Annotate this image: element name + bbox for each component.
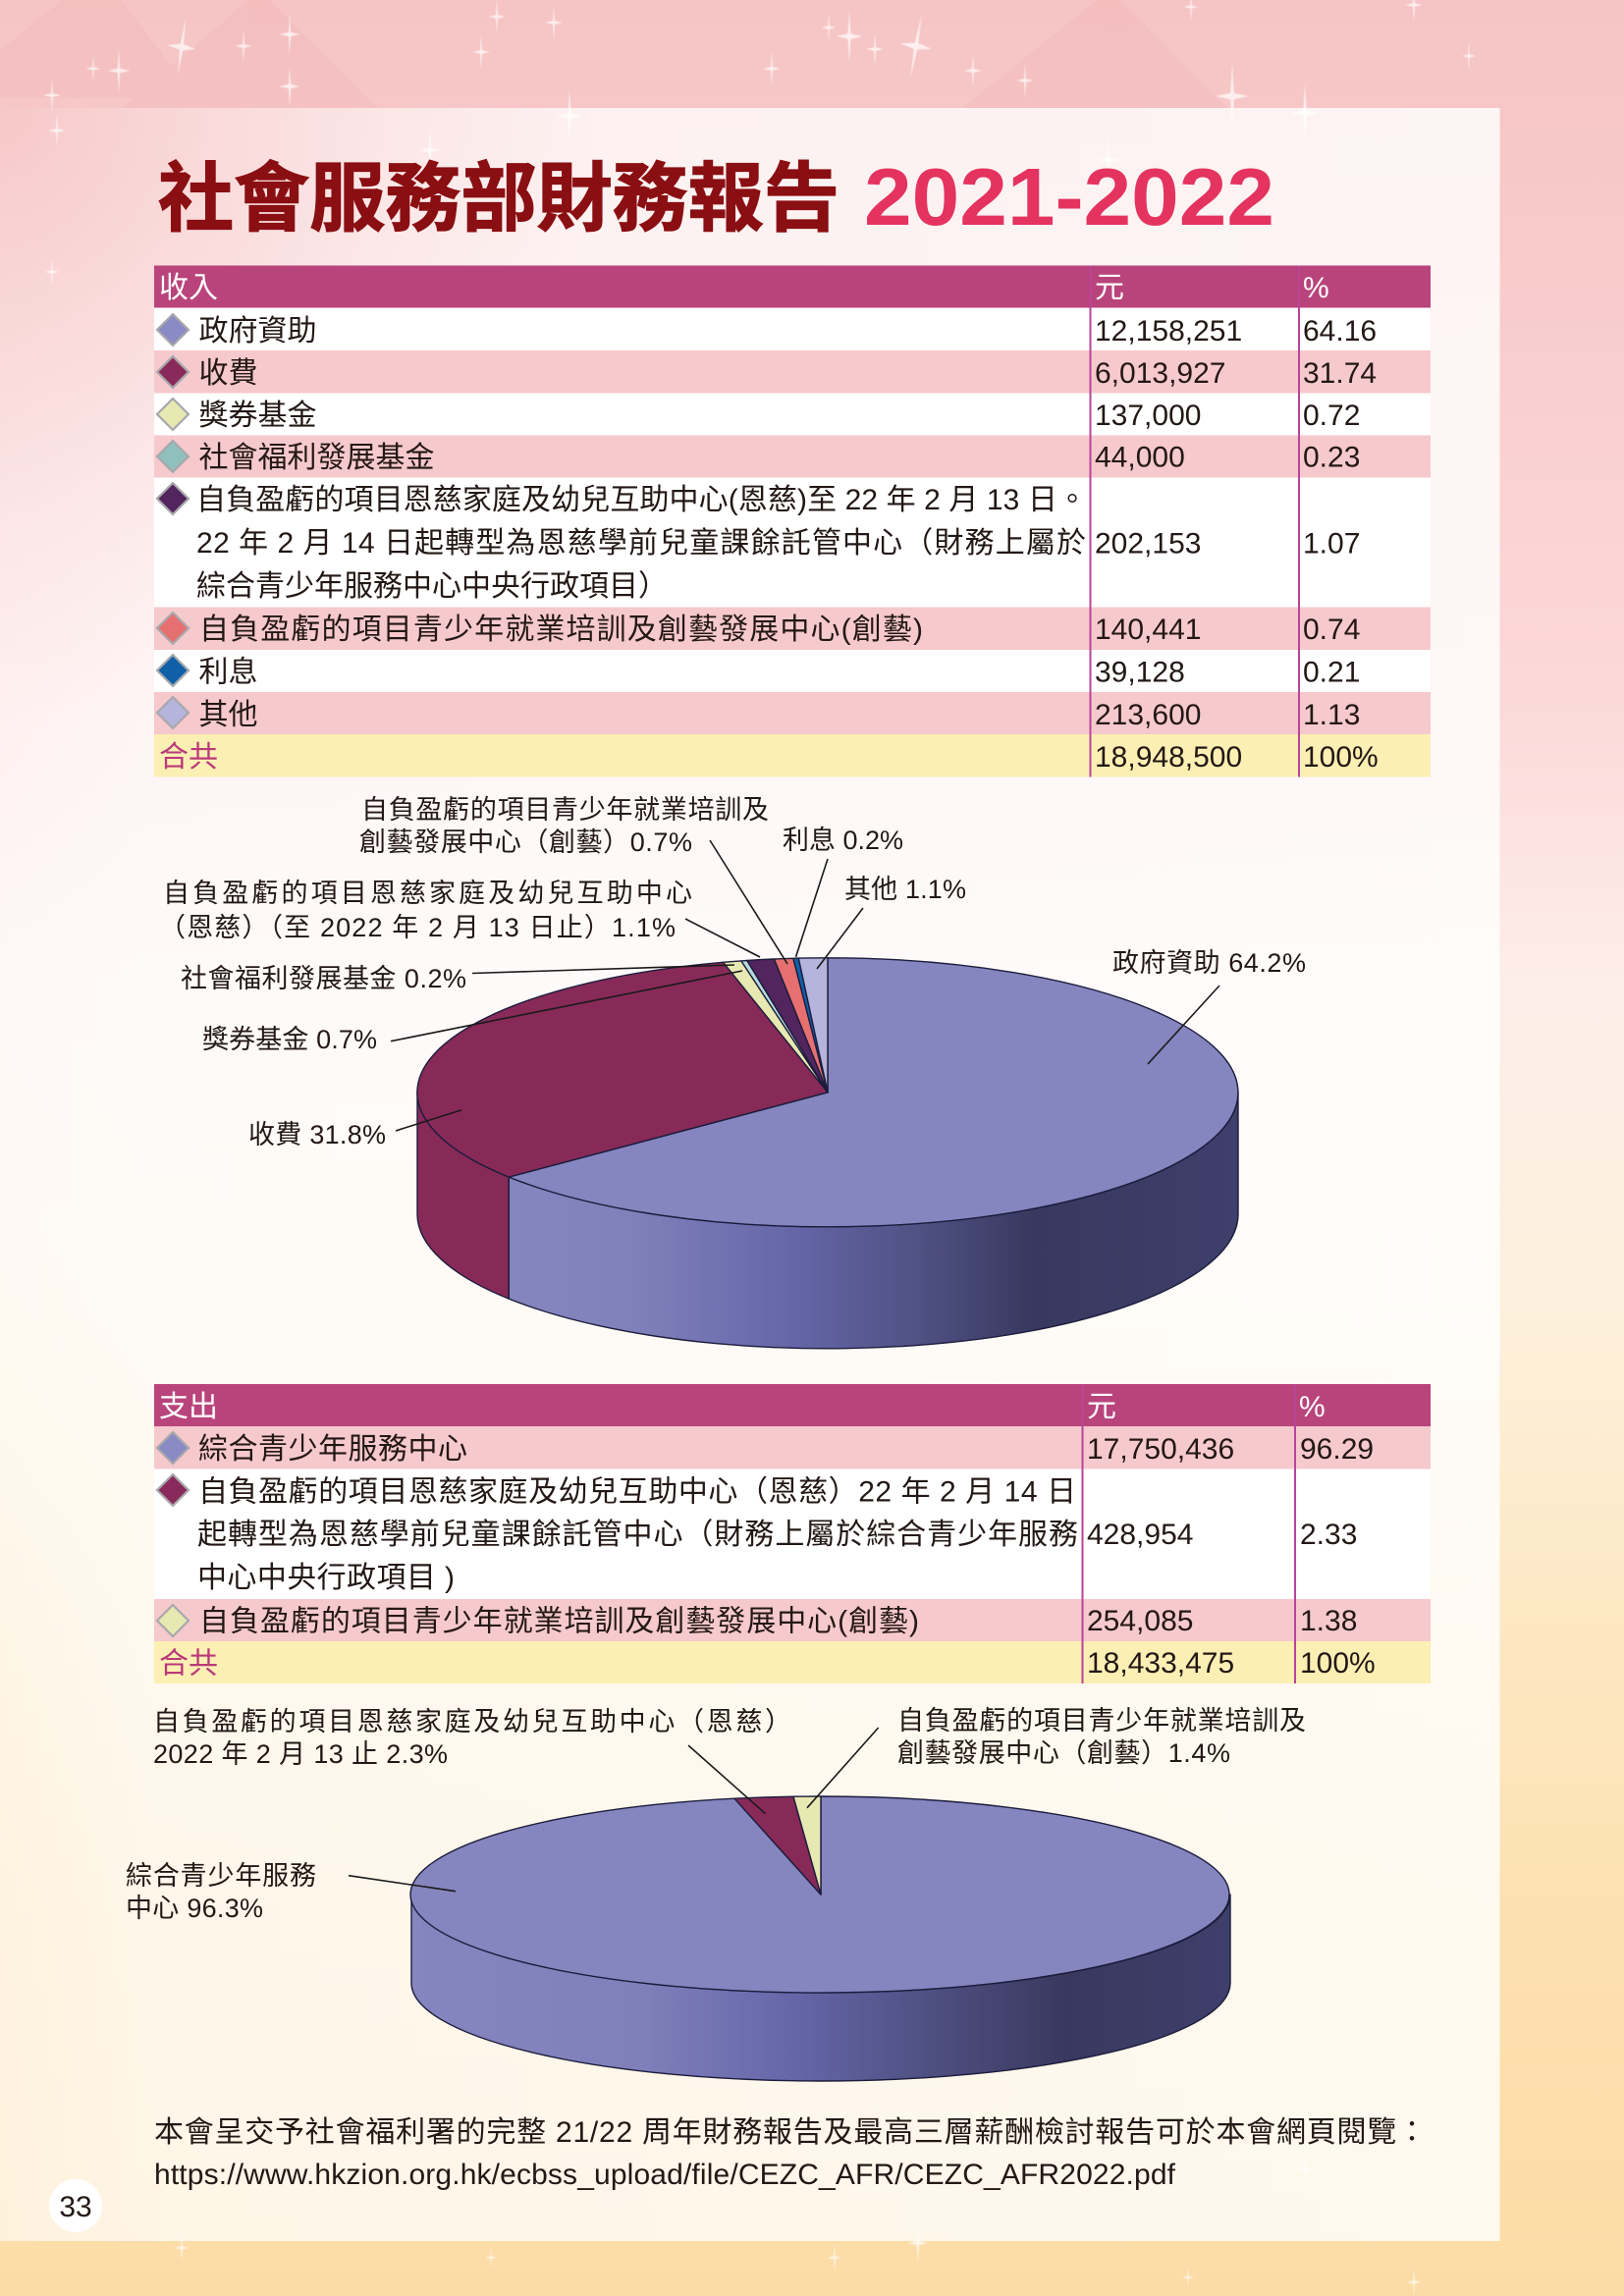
- row: 自負盈虧的項目恩慈: [154, 477, 1431, 607]
- row: 自負盈虧的項目恩慈: 202,153: [1095, 528, 1201, 560]
- row: 社會福利發展基金: [154, 436, 1431, 477]
- expenditure header row: [154, 1384, 1431, 1426]
- row: 獎券基金: 0.72: [1303, 400, 1360, 432]
- row: 自負盈虧的項目恩慈: 綜合青少年服務中心中央行政項目）: [196, 570, 668, 603]
- income header row: 收入: [159, 272, 218, 304]
- income pie labels: 政府資助 64.2%: [1112, 948, 1306, 978]
- expenditure total row: 18,433,475: [1087, 1647, 1234, 1680]
- income header row: %: [1303, 272, 1329, 304]
- expenditure pie labels: 中心 96.3%: [126, 1894, 263, 1923]
- row: 自負盈虧的項目恩慈: 22 年 2 月 14 日: [196, 527, 413, 560]
- income total row: [154, 734, 1431, 777]
- expenditure total row: 合共: [159, 1647, 218, 1681]
- expenditure total row: [154, 1641, 1431, 1683]
- row: 社會福利發展基金: 0.23: [1303, 442, 1360, 473]
- expenditure total row: 100%: [1300, 1647, 1376, 1680]
- income pie labels: 利息 0.2%: [783, 826, 903, 855]
- row: 政府資助: 12,158,251: [1095, 315, 1242, 347]
- row: 利息: [154, 650, 1431, 692]
- row: 創藝: 自負盈虧的項目青少年就業培訓及創藝發展中心(創藝): [199, 614, 923, 646]
- expenditure pie labels: 自負盈虧的項目青少年就業培訓及: [897, 1706, 1306, 1735]
- row: 創藝 expenditure: [154, 1599, 1431, 1641]
- income pie labels: 收費 31.8%: [248, 1120, 386, 1149]
- row: 其他: 其他: [198, 699, 257, 731]
- row: 獎券基金: 137,000: [1095, 400, 1201, 432]
- row: 利息: 39,128: [1095, 656, 1185, 689]
- expenditure pie labels: 2022 年 2 月 13 止 2.3%: [153, 1739, 448, 1769]
- row: 利息: 利息: [198, 656, 257, 689]
- row: 創藝: 140,441: [1095, 614, 1201, 646]
- income header row: 元: [1095, 272, 1124, 304]
- row: 政府資助: 政府資助: [198, 315, 316, 347]
- income total row: 合共: [159, 741, 218, 774]
- row: 綜合青少年服務中心: [154, 1426, 1431, 1468]
- footnote: https://www.hkzion.org.hk/ecbss_upload/file/CEZC_AFR/CEZC_AFR2022.pdf: [154, 2159, 1176, 2191]
- row: 創藝: [154, 607, 1431, 650]
- income pie leader lines: [391, 840, 1219, 1131]
- expenditure header row: 支出: [159, 1391, 218, 1423]
- income pie labels: 獎券基金 0.7%: [202, 1025, 377, 1054]
- row: 政府資助: [154, 308, 1431, 350]
- title: 2021-2022: [864, 151, 1274, 242]
- row: 創藝 expenditure: 1.38: [1300, 1605, 1357, 1637]
- income pie labels: 其他 1.1%: [844, 875, 966, 904]
- row: 恩慈 transition: 自負盈虧的項目恩慈家庭及幼兒互助中心（恩慈）22 年 2 月 14 日: [198, 1476, 1076, 1508]
- footnote: [154, 2116, 1427, 2191]
- row: 創藝 expenditure: 254,085: [1087, 1605, 1193, 1637]
- row: 收費: 收費: [198, 357, 257, 390]
- expenditure pie leader lines: [349, 1728, 879, 1892]
- expenditure header row: %: [1299, 1391, 1326, 1423]
- expenditure 3D pie chart: [410, 1796, 1230, 2081]
- row: 綜合青少年服務中心: 17,750,436: [1087, 1433, 1234, 1466]
- row: 創藝: 0.74: [1303, 614, 1360, 646]
- title: 社會服務部財務報告: [158, 157, 839, 241]
- row: 其他: 1.13: [1303, 699, 1360, 731]
- expenditure pie labels: 創藝發展中心（創藝）1.4%: [897, 1738, 1230, 1768]
- income pie labels: 社會福利發展基金 0.2%: [181, 964, 466, 993]
- row: 社會福利發展基金: 社會福利發展基金: [198, 442, 434, 474]
- row: 利息: 0.21: [1303, 656, 1360, 689]
- row: 自負盈虧的項目恩慈: 起轉型為恩慈學前兒童課餘託管中心（財務上屬於: [414, 527, 1086, 560]
- expenditure table: [154, 1384, 1431, 1683]
- row: 其他: [154, 692, 1431, 734]
- row: 政府資助: 64.16: [1303, 315, 1377, 347]
- row: 恩慈 transition: 2.33: [1300, 1519, 1357, 1551]
- row: 創藝 expenditure: 自負盈虧的項目青少年就業培訓及創藝發展中心(創藝): [199, 1606, 919, 1637]
- row: 社會福利發展基金: 44,000: [1095, 442, 1185, 473]
- expenditure pie labels: [126, 1706, 1306, 1923]
- page number: 33: [59, 2191, 92, 2223]
- row: 恩慈 transition: 428,954: [1087, 1519, 1193, 1551]
- footnote: 本會呈交予社會福利署的完整 21/22 周年財務報告及最高三層薪酬檢討報告可於本會網頁閱覽：: [154, 2116, 1427, 2149]
- expenditure pie labels: 綜合青少年服務: [126, 1861, 316, 1891]
- income pie labels: （恩慈）（至 2022 年 2 月 13 日止）1.1%: [159, 913, 676, 942]
- income pie labels: 自負盈虧的項目恩慈家庭及幼兒互助中心: [163, 879, 692, 908]
- page number: [49, 2179, 102, 2232]
- income header row: [154, 265, 1431, 308]
- row: 綜合青少年服務中心: 綜合青少年服務中心: [198, 1433, 467, 1466]
- expenditure header row: 元: [1087, 1391, 1116, 1423]
- income pie labels: [159, 795, 1306, 1149]
- row: 恩慈 transition: 起轉型為恩慈學前兒童課餘託管中心（財務上屬於綜合青少年服務: [197, 1519, 1078, 1551]
- expenditure pie labels: 自負盈虧的項目恩慈家庭及幼兒互助中心（恩慈）: [153, 1707, 791, 1736]
- row: 獎券基金: [154, 393, 1431, 436]
- row: 恩慈 transition: [154, 1468, 1431, 1599]
- row: 自負盈虧的項目恩慈: 自負盈虧的項目恩慈家庭及幼兒互助中心(恩慈)至 22 年 2 月 13 日。: [196, 484, 1087, 516]
- row: 收費: 31.74: [1303, 357, 1377, 390]
- row: 綜合青少年服務中心: 96.29: [1300, 1433, 1374, 1466]
- row: 收費: 6,013,927: [1095, 357, 1225, 390]
- row: 獎券基金: 獎券基金: [198, 400, 316, 432]
- row: 自負盈虧的項目恩慈: 1.07: [1303, 528, 1360, 560]
- title: [158, 151, 1274, 242]
- row: 其他: 213,600: [1095, 699, 1201, 731]
- income pie labels: 自負盈虧的項目青少年就業培訓及: [361, 795, 769, 825]
- row: 收費: [154, 350, 1431, 393]
- income 3D pie chart: [417, 958, 1238, 1349]
- row: 恩慈 transition: 中心中央行政項目 ): [197, 1562, 455, 1594]
- income table: [154, 265, 1431, 777]
- income total row: 18,948,500: [1095, 741, 1242, 774]
- income total row: 100%: [1303, 741, 1379, 774]
- income pie labels: 創藝發展中心（創藝）0.7%: [359, 828, 692, 857]
